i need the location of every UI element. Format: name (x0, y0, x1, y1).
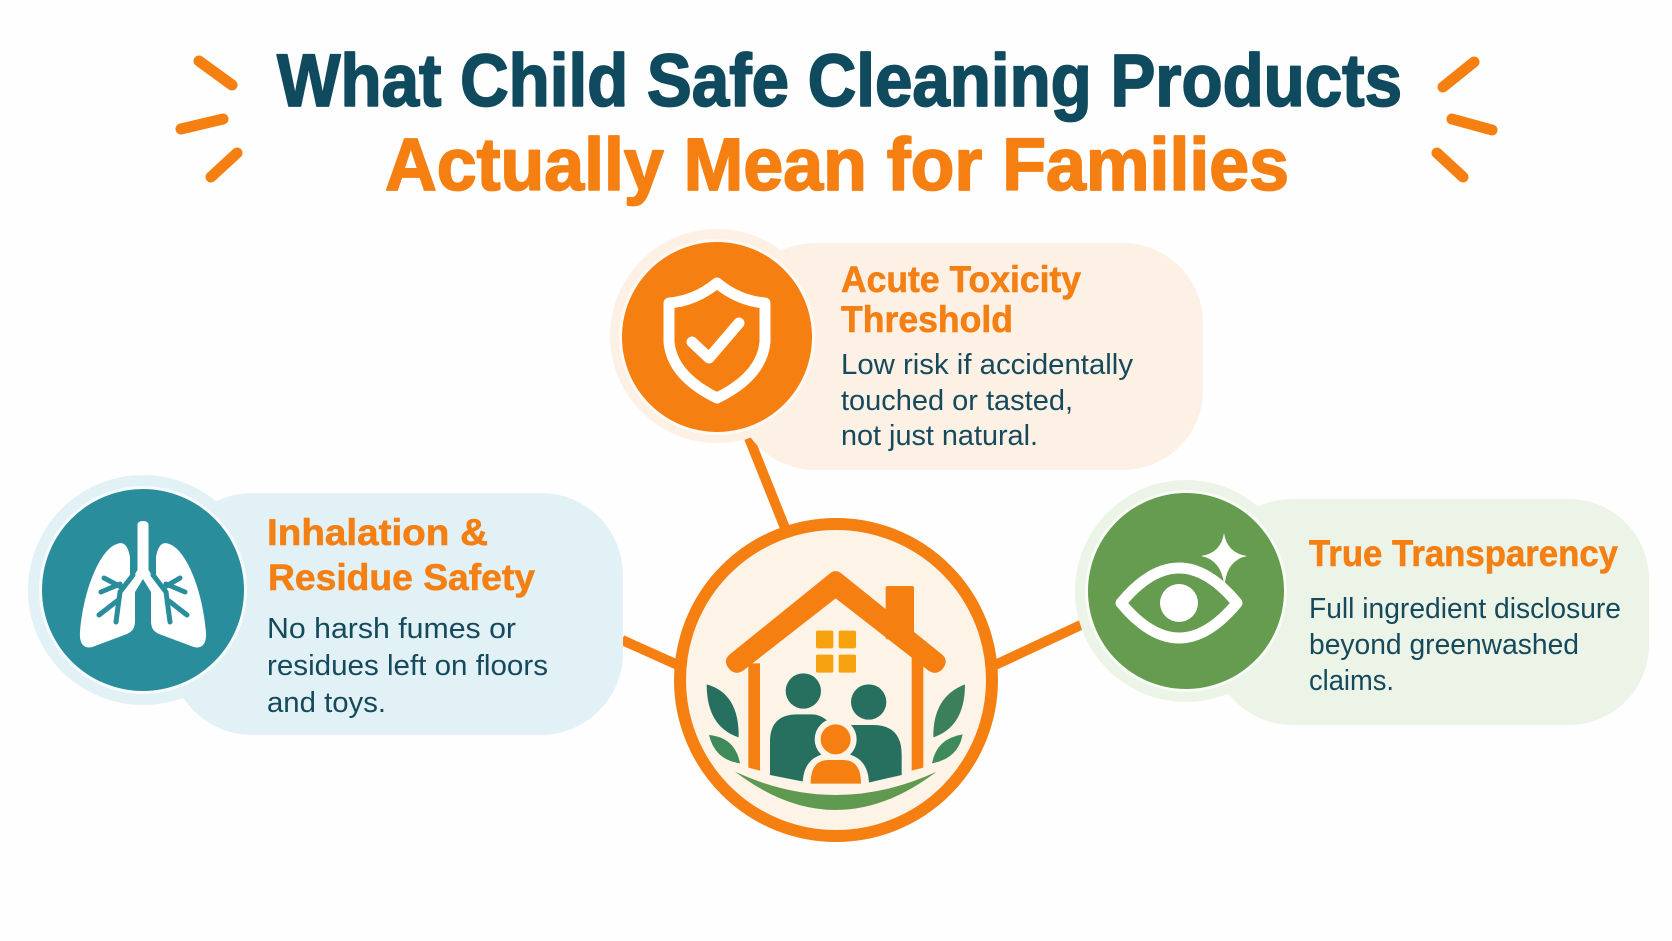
card body text: touched or tasted, (841, 385, 1073, 417)
center emblem: home and family (680, 524, 992, 836)
title (277, 39, 1402, 206)
green smile base (735, 772, 937, 810)
emblem ring (680, 524, 992, 836)
card body text: Full ingredient disclosure (1309, 593, 1621, 625)
title line 1: What Child Safe Cleaning Products (277, 39, 1402, 122)
card body text: residues left on floors (267, 650, 548, 682)
card heading: Acute Toxicity (841, 259, 1081, 300)
card body text (267, 613, 548, 719)
panel: true transparency (1075, 480, 1649, 725)
card body text: and toys. (267, 687, 386, 719)
card background (1212, 499, 1649, 725)
card heading: Threshold (841, 299, 1013, 340)
card body text (841, 349, 1134, 452)
card heading: Residue Safety (268, 557, 535, 598)
card body text: No harsh fumes or (267, 613, 516, 645)
icon: lungs (28, 475, 258, 705)
card body text: not just natural. (841, 420, 1038, 452)
card body text: claims. (1309, 665, 1394, 697)
house window (816, 631, 856, 673)
house (726, 571, 946, 771)
panel: inhalation and residue safety (28, 475, 623, 735)
icon: eye with sparkle (1075, 480, 1297, 702)
card background (170, 493, 623, 735)
card heading: Inhalation & (267, 512, 488, 553)
title line 2: Actually Mean for Families (385, 123, 1289, 206)
card body text: Low risk if accidentally (841, 349, 1134, 381)
family (770, 673, 902, 785)
icon: shield with check (610, 229, 824, 443)
leaves (707, 684, 965, 763)
right title rays (1437, 62, 1492, 177)
card body text: beyond greenwashed (1309, 629, 1579, 661)
panel: acute toxicity threshold (610, 229, 1203, 470)
card heading: True Transparency (1309, 533, 1618, 574)
card background (735, 243, 1203, 470)
connector lines (622, 438, 1083, 666)
card heading (267, 512, 535, 598)
left title rays (181, 61, 237, 177)
card heading (841, 259, 1081, 340)
card body text (1309, 593, 1621, 697)
